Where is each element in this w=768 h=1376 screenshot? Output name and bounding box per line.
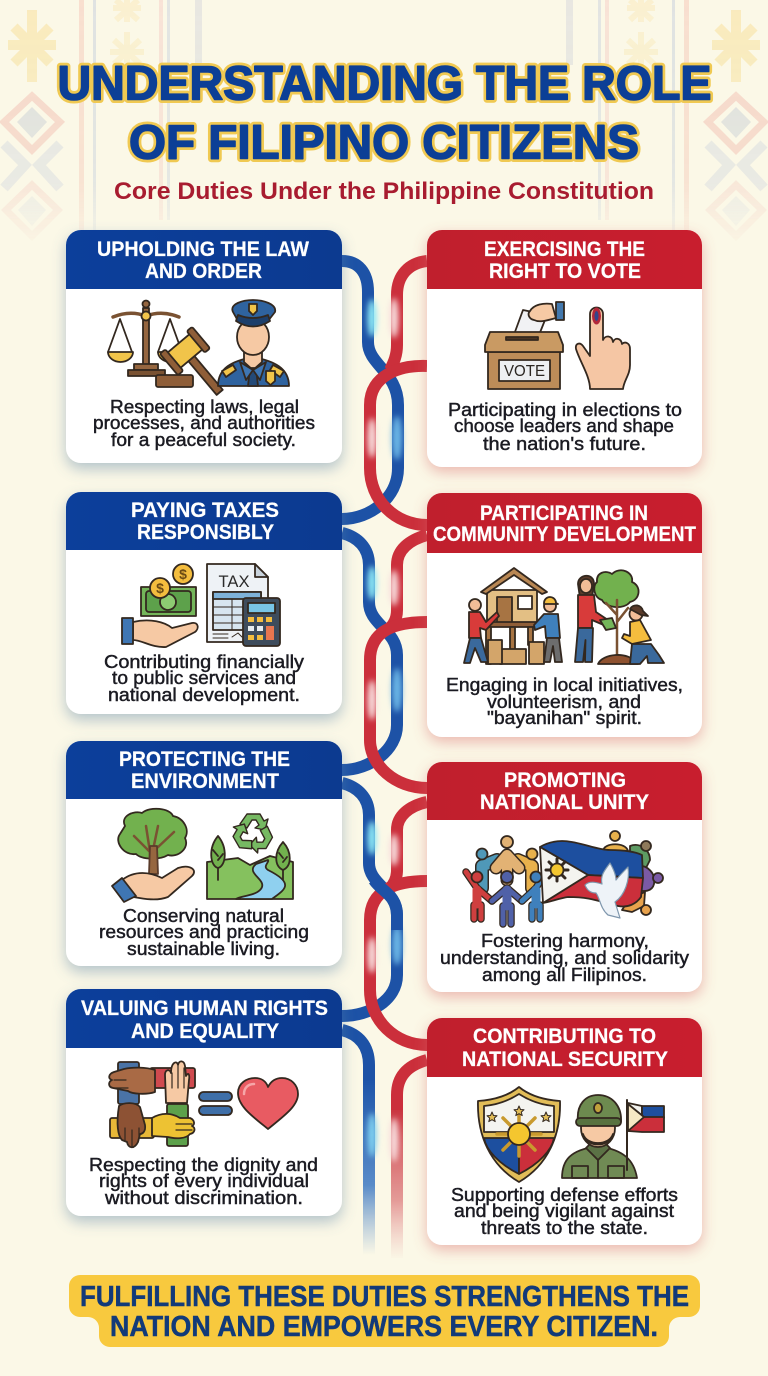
- header: taxes: PAYING TAXES: [131, 498, 279, 522]
- panel: exercising the right to vote: [427, 230, 702, 467]
- header: rights: VALUING HUMAN RIGHTS: [81, 996, 328, 1020]
- panel: promoting national unity: [427, 762, 702, 992]
- body text: vote: Participating in elections to: [448, 400, 682, 420]
- body text: upholding: [93, 397, 315, 450]
- panel: contributing to national security: [427, 1018, 702, 1245]
- header: vote: RIGHT TO VOTE: [489, 259, 641, 283]
- footer banner: [69, 1275, 700, 1347]
- icon: money in hand: $: [179, 566, 187, 582]
- icon: ballot box: VOTE: [504, 363, 545, 380]
- icon: heart: [238, 1078, 298, 1129]
- icon: four linked hands: [109, 1061, 195, 1147]
- body text: taxes: Contributing financially: [104, 652, 304, 672]
- icon: tree in hand: [112, 809, 194, 902]
- header: unity: NATIONAL UNITY: [480, 790, 649, 814]
- body text: community: volunteerism, and: [487, 692, 641, 712]
- connector ribbons: [342, 261, 427, 1258]
- body text: rights: [89, 1155, 318, 1208]
- body text: security: [451, 1185, 678, 1238]
- header: rights: [66, 989, 342, 1048]
- icon: tax form and calculator: TAX: [218, 572, 250, 591]
- footer banner: FULFILLING THESE DUTIES STRENGTHENS THE: [80, 1281, 689, 1313]
- header: vote: [427, 230, 702, 289]
- body text: community: "bayanihan" spirit.: [487, 708, 642, 728]
- red ribbon highlights: [368, 298, 398, 1162]
- body text: vote: [448, 400, 682, 454]
- icon: tax form and calculator: [207, 564, 280, 646]
- header: community: COMMUNITY DEVELOPMENT: [433, 522, 696, 546]
- header: rights: AND EQUALITY: [131, 1019, 279, 1043]
- body text: security: threats to the state.: [481, 1218, 648, 1238]
- header: taxes: [66, 492, 342, 550]
- header: vote: EXERCISING THE: [484, 237, 645, 261]
- header: security: CONTRIBUTING TO: [473, 1024, 656, 1048]
- header: upholding: UPHOLDING THE LAW: [97, 237, 310, 261]
- body text: upholding: Respecting laws, legal: [110, 397, 299, 417]
- body text: environment: sustainable living.: [127, 939, 280, 959]
- header: community: [427, 493, 702, 553]
- header: unity: [427, 762, 702, 820]
- panel: participating in community development: [427, 493, 702, 737]
- body text: rights: rights of every individual: [99, 1171, 309, 1191]
- panel: upholding the law and order: [66, 230, 342, 463]
- icon: money in hand: [122, 564, 198, 647]
- header: upholding: AND ORDER: [145, 259, 262, 283]
- title: OF FILIPINO CITIZENS: [129, 116, 639, 170]
- body text: upholding: for a peaceful society.: [111, 430, 296, 450]
- body text: unity: [440, 931, 689, 985]
- icon: people holding hands: [466, 836, 548, 924]
- body text: security: and being vigilant against: [454, 1201, 674, 1221]
- body text: rights: Respecting the dignity and: [89, 1155, 318, 1175]
- body text: vote: the nation's future.: [483, 434, 646, 454]
- blue ribbon highlights: [368, 299, 402, 1157]
- title: [58, 58, 712, 170]
- blue strand crossing over: [374, 880, 397, 930]
- title: OF FILIPINO CITIZENS: [129, 116, 639, 170]
- body text: rights: without discrimination.: [104, 1188, 303, 1208]
- body text: taxes: national development.: [108, 685, 300, 705]
- icon: ballot box: [485, 302, 564, 389]
- icon: soldier: [562, 1095, 637, 1178]
- icon: shield with sun: [478, 1087, 560, 1182]
- body text: unity: Fostering harmony,: [481, 931, 649, 951]
- header: upholding: [66, 230, 342, 289]
- title: UNDERSTANDING THE ROLE: [58, 58, 712, 110]
- icon: house building volunteers: [464, 568, 664, 664]
- body text: environment: [99, 906, 309, 959]
- panel: paying taxes responsibly: [66, 492, 342, 714]
- icon: police officer: [218, 300, 289, 386]
- body text: taxes: to public services and: [112, 668, 296, 688]
- header: environment: PROTECTING THE: [119, 747, 290, 771]
- body text: unity: understanding, and solidarity: [440, 948, 689, 968]
- header: community: PARTICIPATING IN: [480, 501, 648, 525]
- blue ribbon path: [342, 261, 398, 1255]
- body text: unity: among all Filipinos.: [482, 965, 647, 985]
- icon: scales of justice and gavel: [108, 300, 236, 406]
- panel: valuing human rights and equality: [66, 989, 342, 1216]
- title: UNDERSTANDING THE ROLE: [58, 58, 712, 110]
- header: security: [427, 1018, 702, 1077]
- icon: equals sign: [199, 1092, 232, 1115]
- subtitle: Core Duties Under the Philippine Constitution: [114, 178, 654, 205]
- header: security: NATIONAL SECURITY: [462, 1047, 668, 1071]
- icon: small flag on pole: [627, 1100, 664, 1170]
- header: environment: [66, 741, 342, 799]
- icon: recycling landscape: [207, 814, 293, 899]
- red ribbon path: [370, 261, 427, 1258]
- body text: community: [446, 675, 683, 728]
- icon: philippine flag and dove: [540, 831, 663, 918]
- header: environment: ENVIRONMENT: [131, 769, 279, 793]
- body text: upholding: processes, and authorities: [93, 413, 315, 433]
- body text: security: Supporting defense efforts: [451, 1185, 678, 1205]
- footer banner: NATION AND EMPOWERS EVERY CITIZEN.: [110, 1311, 658, 1343]
- icon: money in hand: $: [156, 580, 164, 596]
- background woven pattern: [4, 0, 764, 240]
- body text: vote: choose leaders and shape: [454, 416, 674, 436]
- header: unity: PROMOTING: [504, 768, 626, 792]
- icon: inked finger: [576, 308, 630, 389]
- body text: taxes: [104, 652, 304, 705]
- panel: protecting the environment: [66, 741, 342, 966]
- body text: environment: resources and practicing: [99, 922, 309, 942]
- body text: community: Engaging in local initiatives,: [446, 675, 683, 695]
- body text: environment: Conserving natural: [123, 906, 284, 926]
- header: taxes: RESPONSIBLY: [137, 520, 274, 544]
